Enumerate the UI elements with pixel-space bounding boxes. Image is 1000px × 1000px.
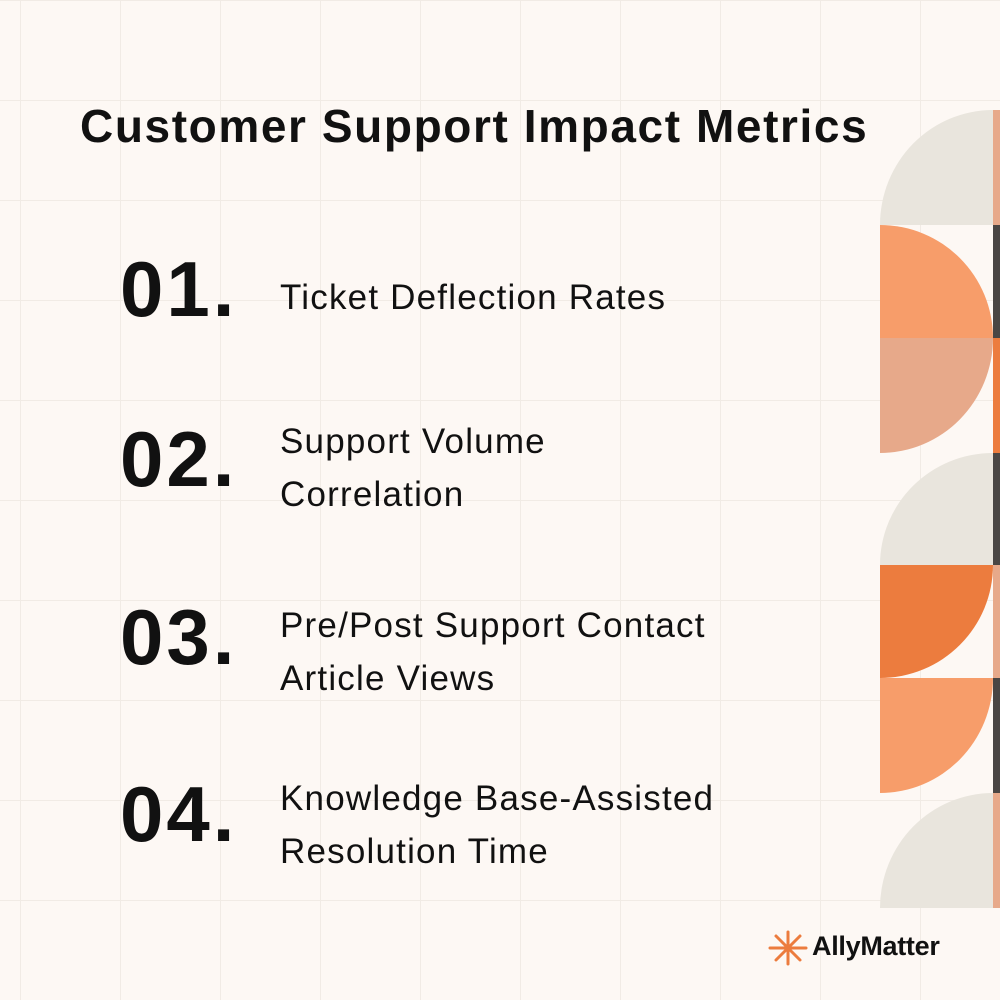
text: Resolution Time — [280, 832, 549, 871]
text: 02. — [120, 415, 237, 503]
text: Ticket Deflection Rates — [280, 278, 666, 317]
text: Correlation — [280, 475, 464, 514]
text: 03. — [120, 593, 237, 681]
item 04 — [120, 770, 714, 871]
item 02 — [120, 415, 546, 514]
item 01 — [120, 245, 666, 333]
icon: asterisk — [768, 930, 808, 966]
text: 01. — [120, 245, 237, 333]
item 03 — [120, 593, 706, 698]
text: Knowledge Base-Assisted — [280, 779, 714, 818]
text: Pre/Post Support Contact — [280, 606, 706, 645]
text: 04. — [120, 770, 237, 858]
title: Customer Support Impact Metrics — [80, 100, 868, 152]
logo — [768, 930, 940, 966]
text: Support Volume — [280, 422, 546, 461]
logo: AllyMatter — [812, 931, 940, 961]
text: Article Views — [280, 659, 495, 698]
